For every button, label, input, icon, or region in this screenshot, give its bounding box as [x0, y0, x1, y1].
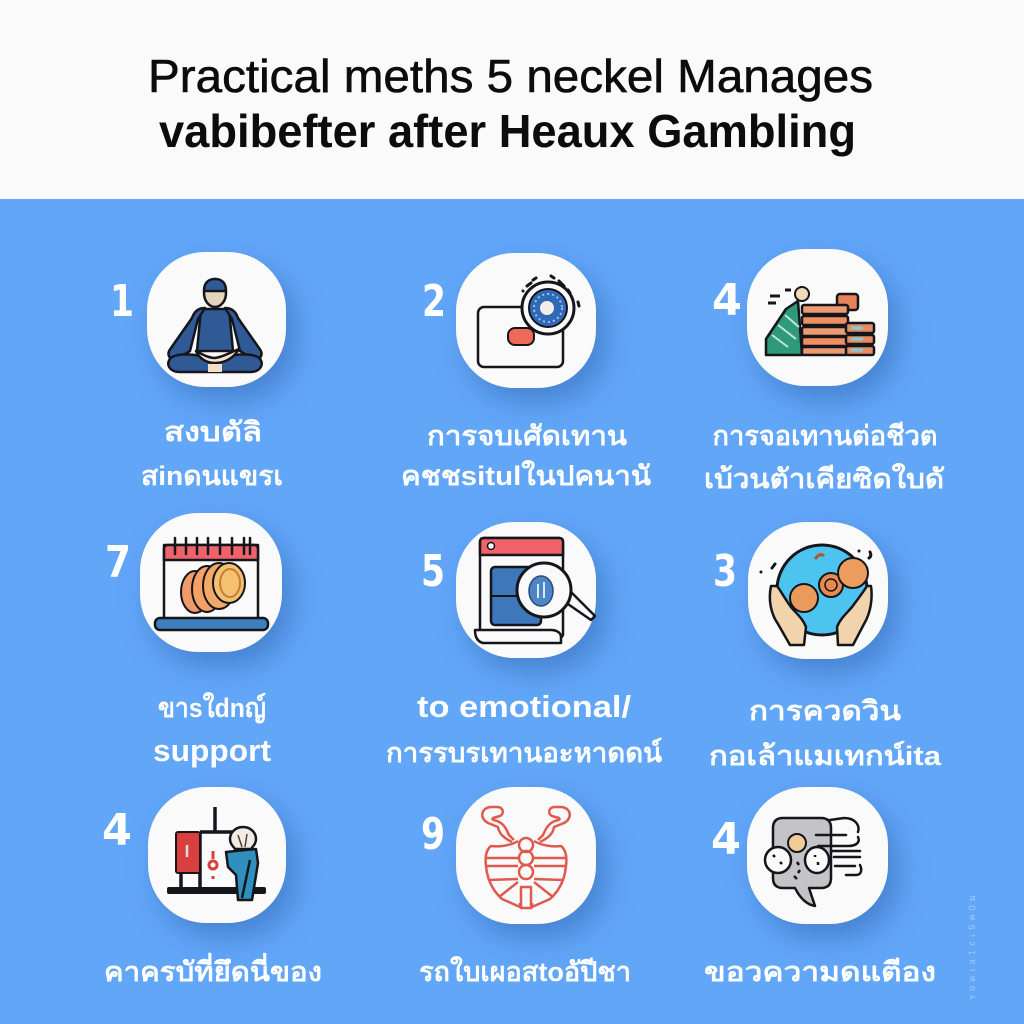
title: [148, 50, 873, 157]
caption 1: สงบตัลิ: [164, 417, 262, 447]
tile 1: meditation: [147, 252, 296, 401]
caption 7: คาครบัที่ยึดนี่ของ: [104, 952, 322, 987]
number 4 left: 4: [102, 805, 132, 856]
tile 4: calendar and coins: [140, 513, 292, 666]
caption 5: to emotional/: [417, 689, 631, 724]
header band: [0, 0, 1024, 199]
caption 6: กอเล้าแมเทกน์ita: [709, 740, 942, 771]
tile 7: card and figure: [148, 787, 296, 937]
caption 3: การจอเทานต่อชีวต: [712, 421, 938, 451]
faint vertical watermark: รoดเa1cเ5ค0ม: [967, 895, 977, 1000]
caption 6: การควดวิน: [749, 696, 902, 726]
caption 3: เบ้วนตัาเคียซิดใบดั: [704, 463, 945, 494]
caption 1: [141, 417, 283, 491]
tile 5: browser and magnifier: [456, 522, 606, 672]
caption 4: [153, 692, 271, 768]
caption 2: การจบเศัดเทาน: [427, 421, 628, 451]
number 2: 2: [422, 276, 446, 327]
caption 3: [704, 421, 945, 494]
number 3: 3: [713, 546, 737, 597]
caption 9: ขอวความดแตีอง: [704, 957, 936, 987]
tile 8: red outline anatomy: [456, 787, 606, 938]
number 4 right: 4: [711, 814, 741, 865]
tile 2: eye and card: [456, 253, 606, 402]
number 4 top right: 4: [712, 275, 742, 326]
caption 8: รถใบเผอสtoอัปีชา: [419, 956, 631, 987]
title: vabibefter after Heaux Gambling: [159, 105, 856, 157]
caption 4: support: [153, 733, 271, 768]
caption 5: การรบรเทานอะหาดดน์: [386, 737, 663, 768]
tile 6: hands holding globe and coins: [748, 522, 898, 673]
number 9: 9: [421, 809, 445, 860]
tile 9: speech bubble with faces: [747, 787, 898, 938]
number 7: 7: [105, 537, 131, 588]
caption 4: ขาsใdnญ์: [158, 692, 266, 724]
tile 3: books and money stacks: [747, 249, 898, 400]
number 1: 1: [110, 276, 134, 327]
caption 1: สinดนแขรเ: [141, 461, 283, 491]
caption 2: คชชsitulในปคนานั: [401, 460, 652, 491]
caption 6: [709, 696, 942, 771]
title: Practical meths 5 neckel Manages: [148, 50, 873, 102]
caption 5: [386, 689, 663, 768]
caption 2: [401, 421, 652, 491]
number 5: 5: [421, 546, 445, 597]
